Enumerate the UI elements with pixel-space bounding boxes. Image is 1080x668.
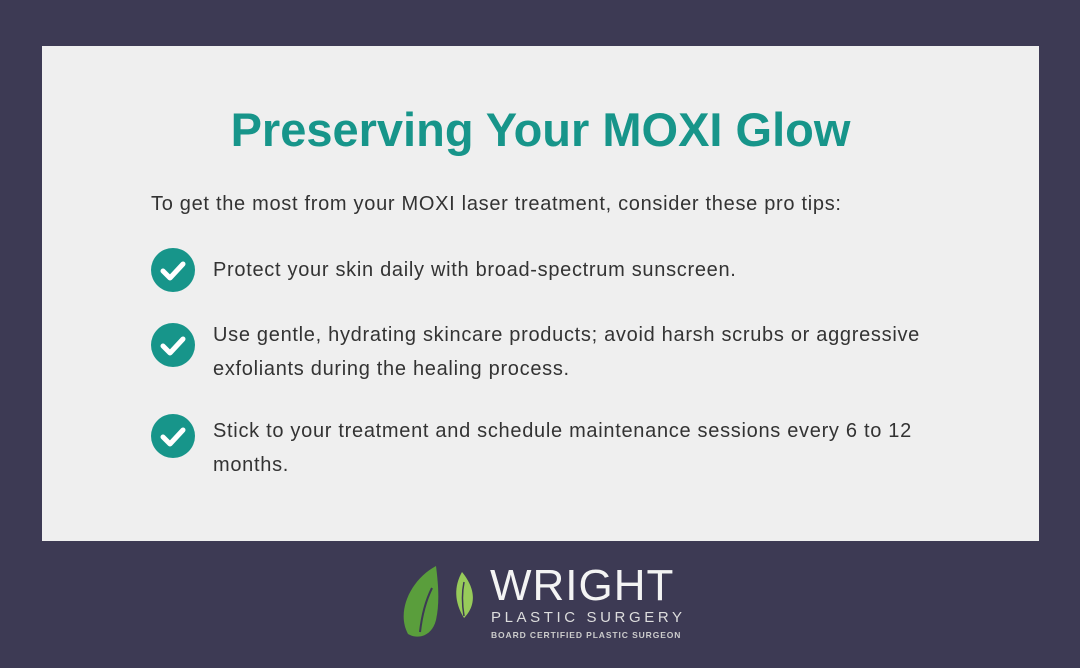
tip 3	[151, 414, 912, 476]
title: Preserving Your MOXI Glow	[231, 103, 850, 156]
intro text: To get the most from your MOXI laser treatment, consider these pro tips:	[151, 193, 842, 215]
icon: check	[151, 323, 195, 367]
panel: tips card	[42, 46, 1039, 541]
icon: check	[151, 248, 195, 292]
tip 1	[151, 248, 737, 292]
logo text: WRIGHT	[490, 561, 674, 610]
icon: leaves	[404, 566, 473, 637]
logo	[404, 561, 686, 640]
icon: check	[151, 414, 195, 458]
logo: PLASTIC SURGERY	[491, 609, 686, 626]
tip text 3: Stick to your treatment and schedule maintenance sessions every 6 to 12 months.	[213, 420, 912, 476]
tip text 2: Use gentle, hydrating skincare products; avoid harsh scrubs or aggressive exfoliants during the healing process.	[213, 324, 920, 380]
logo: BOARD CERTIFIED PLASTIC SURGEON	[491, 630, 681, 640]
tip text 1: Protect your skin daily with broad-spectrum sunscreen.	[213, 259, 737, 281]
tip 2	[151, 323, 920, 380]
